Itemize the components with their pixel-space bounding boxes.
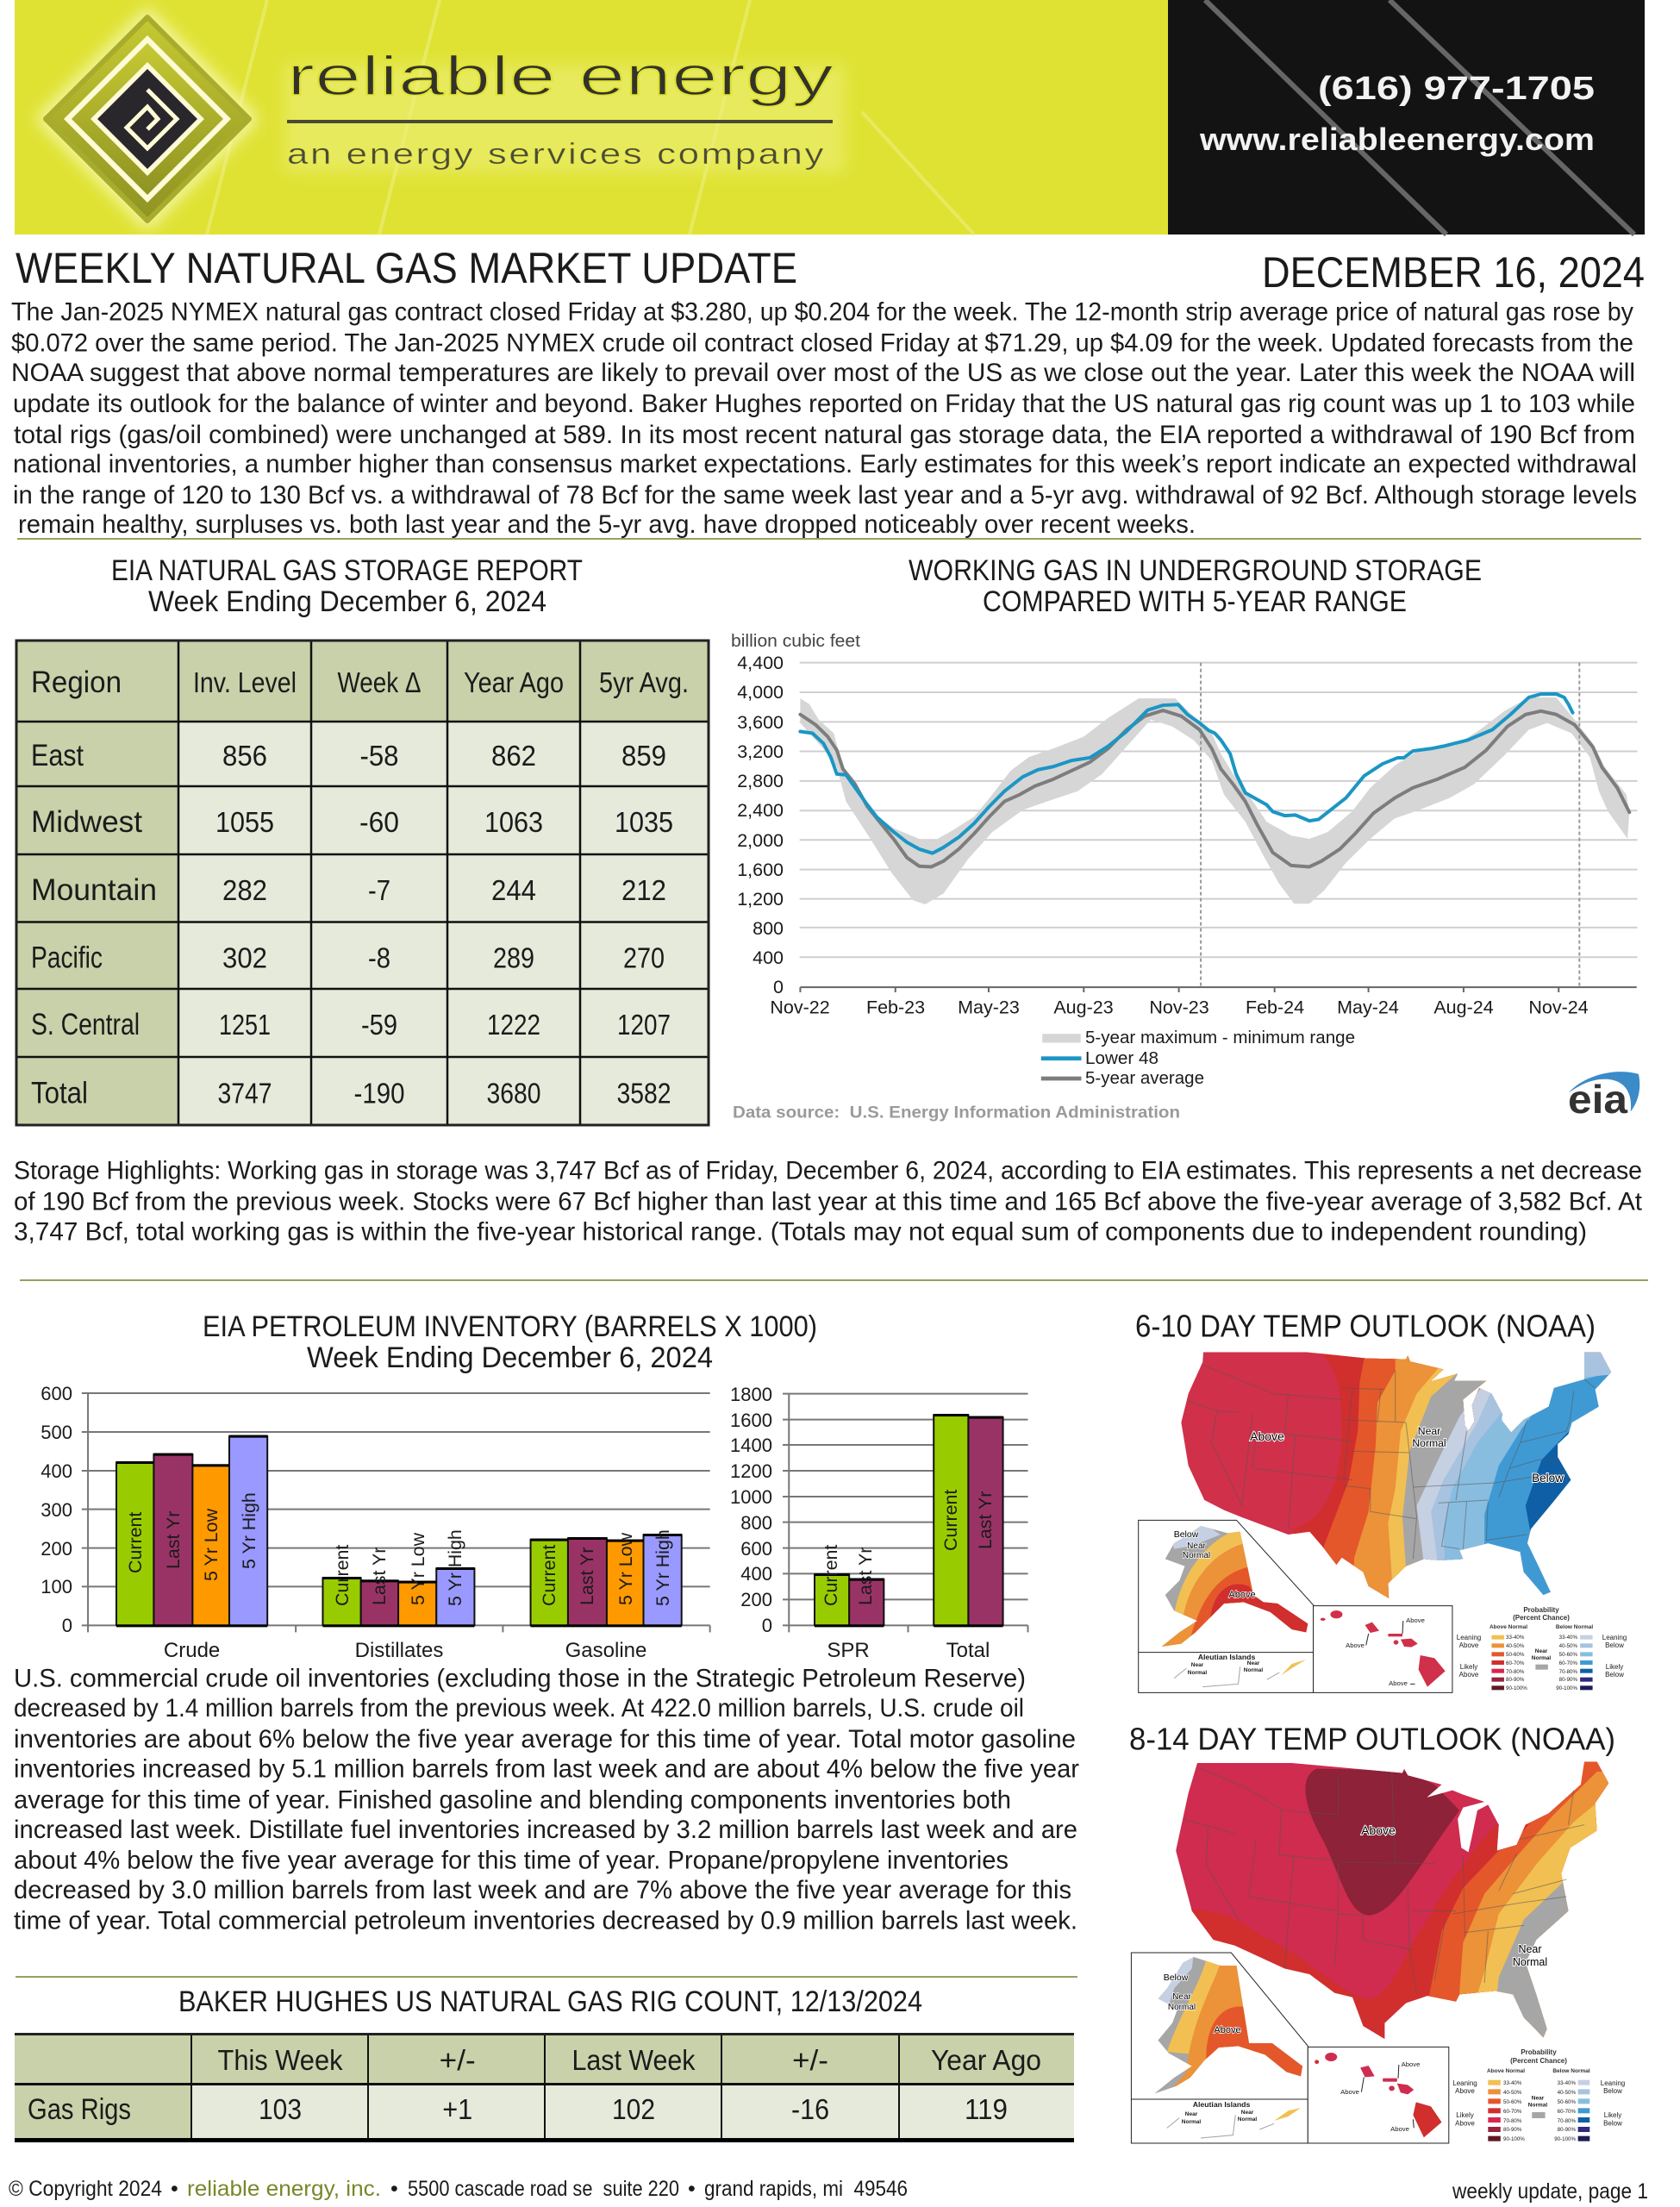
chart: working gas in underground storage — [731, 632, 1639, 1122]
divider rule — [287, 120, 833, 123]
map labels: Near — [1187, 1541, 1207, 1551]
inset labels — [1182, 2060, 1420, 2133]
row: S. Central — [31, 1008, 671, 1041]
probability legend text: 40-50% — [1506, 1643, 1525, 1649]
probability legend text: 90-100% — [1503, 2136, 1525, 2142]
probability legend text: Below Normal — [1556, 1624, 1593, 1630]
inset labels: Aleutian Islands — [1198, 1653, 1255, 1661]
rig table header: This Week — [217, 2044, 343, 2076]
category labels: Gasoline — [565, 1639, 646, 1662]
left axis labels: 0 — [62, 1615, 72, 1636]
x axis labels: Feb-24 — [1246, 997, 1304, 1017]
probability legend text: 33-40% — [1506, 1635, 1525, 1641]
rig table row: 103 — [259, 2093, 302, 2125]
inset labels: Aleutian Islands — [1193, 2100, 1250, 2109]
map artwork — [1131, 1761, 1608, 2143]
probability legend text: Probability — [1521, 2048, 1557, 2056]
chart legend: 5-year maximum - minimum range — [1085, 1028, 1355, 1047]
y axis labels: 400 — [753, 947, 784, 968]
probability legend text: Above — [1459, 1641, 1479, 1649]
row: Midwest: 1035 — [615, 806, 673, 838]
row: East: -58 — [360, 740, 398, 772]
probability legend swatches — [1491, 1635, 1593, 1690]
inset labels: Above — [1406, 1616, 1425, 1624]
probability legend text: 80-90% — [1503, 2127, 1522, 2133]
petroleum commentary paragraph — [14, 1664, 1079, 1935]
category labels — [164, 1639, 990, 1662]
company name: reliable energy — [287, 45, 834, 107]
Hawaii inset — [1308, 2047, 1449, 2143]
probability legend text: Above — [1455, 2120, 1475, 2128]
y axis labels: 2,000 — [737, 830, 784, 851]
row: Total: 3747 — [217, 1078, 272, 1109]
probability legend text: 33-40% — [1558, 2080, 1576, 2086]
row: S. Central: S. Central — [31, 1008, 140, 1041]
row: Mountain — [31, 873, 666, 907]
row: Midwest: 1063 — [484, 806, 543, 838]
market summary paragraph — [11, 298, 1637, 539]
probability legend text: 33-40% — [1503, 2080, 1522, 2086]
row: Total: -190 — [353, 1078, 405, 1109]
phone number: (616) 977-1705 — [1318, 71, 1595, 107]
probability legend text: Below — [1605, 1641, 1624, 1649]
map labels: Normal — [1183, 1551, 1210, 1560]
bar labels: Current — [940, 1490, 961, 1551]
map labels: Above — [1228, 1590, 1256, 1600]
map labels: Near — [1518, 1943, 1542, 1955]
probability legend text: 40-50% — [1503, 2090, 1522, 2096]
left axis labels — [41, 1383, 72, 1636]
heading: 8-14 day outlook: 8-14 DAY TEMP OUTLOOK (NOAA) — [1129, 1721, 1615, 1757]
row: Midwest: Midwest — [31, 805, 142, 839]
icon: reliable energy diamond logo — [35, 7, 259, 231]
rig table row: -16 — [791, 2093, 829, 2125]
row: Total: 3680 — [486, 1078, 541, 1109]
icon: EIA arc — [1569, 1072, 1639, 1111]
table: rig count — [15, 2033, 1074, 2142]
y axis labels: 3,200 — [737, 741, 784, 762]
inset labels: Above — [1389, 1679, 1408, 1687]
rig table row: 119 — [965, 2093, 1008, 2125]
heading: rig count: BAKER HUGHES US NATURAL GAS RIG COUNT, 12/13/2024 — [178, 1985, 922, 2018]
map: 6-10 day temperature outlook — [1138, 1352, 1627, 1693]
heading: 6-10 day outlook: 6-10 DAY TEMP OUTLOOK (NOAA) — [1135, 1309, 1596, 1343]
right axis labels: 1200 — [730, 1460, 772, 1482]
table header row: Week Δ — [338, 666, 421, 698]
probability legend text: Below — [1603, 2087, 1622, 2095]
category labels: SPR — [827, 1639, 870, 1662]
chart legend: Lower 48 — [1085, 1049, 1159, 1068]
probability legend text: 70-80% — [1559, 1669, 1577, 1675]
probability legend text: 33-40% — [1559, 1635, 1577, 1641]
map labels: Normal — [1168, 2003, 1196, 2012]
rig table row: Gas Rigs — [28, 2093, 131, 2126]
probability legend text: 60-70% — [1503, 2109, 1522, 2115]
right axis labels — [730, 1384, 772, 1636]
y axis labels: 1,600 — [737, 860, 784, 880]
x axis labels: Nov-22 — [770, 997, 830, 1017]
probability legend text: 50-60% — [1503, 2099, 1522, 2105]
probability legend text: Below — [1605, 1671, 1624, 1679]
market summary paragraph: total rigs (gas/oil combined) were unchanged at 589. In its most recent natural gas storage data, the EIA reported a withdrawal of 190 Bcf from — [14, 421, 1635, 449]
row: East: East — [31, 739, 84, 772]
bar labels: 5 Yr High — [653, 1529, 673, 1606]
probability legend text: Leaning — [1601, 2079, 1625, 2087]
heading: storage report: EIA NATURAL GAS STORAGE REPORT — [111, 554, 583, 587]
heading: petroleum inventory: Week Ending December 6, 2024 — [307, 1341, 713, 1374]
city: grand rapids, mi 49546 — [704, 2177, 908, 2201]
map labels: Above — [1250, 1429, 1284, 1443]
probability legend text: 90-100% — [1554, 2136, 1576, 2142]
map labels — [1174, 1425, 1564, 1600]
bar labels: Current — [125, 1512, 146, 1573]
market summary paragraph: update its outlook for the balance of winter and beyond. Baker Hughes reported on Friday that the US natural gas rig count was up 1 to 103 while — [13, 390, 1635, 418]
probability legend text: Likely — [1460, 1663, 1477, 1671]
map artwork — [1138, 1352, 1612, 1693]
bar labels — [125, 1490, 996, 1606]
chart legend: 5-year average — [1085, 1069, 1204, 1088]
inset labels: Near — [1241, 2110, 1254, 2116]
left axis labels: 500 — [41, 1422, 72, 1443]
probability legend text: 70-80% — [1506, 1669, 1525, 1675]
row: Total: Total — [31, 1076, 88, 1110]
inset labels: Above — [1340, 2088, 1359, 2096]
map: 8-14 day temperature outlook — [1131, 1761, 1625, 2143]
probability legend text: 90-100% — [1556, 1685, 1577, 1691]
table: EIA storage report — [16, 640, 709, 1126]
heading: storage report — [111, 554, 583, 618]
row: Mountain: 282 — [222, 874, 267, 906]
x axis labels: May-23 — [958, 997, 1020, 1017]
probability legend text: 70-80% — [1558, 2118, 1576, 2124]
state boundary lines — [1189, 1365, 1595, 1559]
footer: • — [171, 2177, 178, 2201]
row: East: 859 — [621, 740, 666, 772]
Alaska and Aleutian inset — [1139, 1520, 1321, 1692]
right axis labels: 200 — [740, 1589, 772, 1610]
Alaska and Aleutian inset — [1131, 1953, 1308, 2143]
row: Pacific: 289 — [493, 941, 534, 974]
probability legend text: Likely — [1606, 1663, 1623, 1671]
x axis labels: Aug-24 — [1433, 997, 1494, 1017]
bar labels: Current — [821, 1545, 841, 1606]
x axis labels — [770, 997, 1589, 1017]
inset labels: Normal — [1182, 2119, 1201, 2125]
row: Total: 3582 — [617, 1078, 671, 1109]
petroleum commentary paragraph: time of year. Total commercial petroleum inventories decreased by 0.9 million barrels last week. — [14, 1907, 1077, 1935]
x axis labels: Aug-23 — [1053, 997, 1114, 1017]
EIA wordmark: eia — [1568, 1077, 1627, 1122]
copyright: © Copyright 2024 — [9, 2177, 162, 2201]
tagline: an energy services company — [287, 138, 826, 171]
right axis labels: 1000 — [730, 1486, 772, 1508]
inset labels: Above — [1402, 2060, 1420, 2068]
petroleum commentary paragraph: increased last week. Distillate fuel inventories increased by 3.2 million barrels last week and are — [14, 1816, 1077, 1844]
map labels: Below — [1164, 1973, 1189, 1983]
bar labels: Last Yr — [975, 1491, 996, 1549]
petroleum commentary paragraph: decreased by 1.4 million barrels from the previous week. At 422.0 million barrels, U.S. crude oil — [14, 1694, 1024, 1722]
inset labels: Near — [1185, 2111, 1198, 2117]
heading: working gas chart: COMPARED WITH 5-YEAR RANGE — [983, 585, 1407, 618]
map labels: Near — [1418, 1425, 1440, 1437]
bar plot area — [81, 1392, 1029, 1633]
x axis labels: May-24 — [1337, 997, 1399, 1017]
row: Pacific: 302 — [222, 941, 267, 974]
left axis labels: 600 — [41, 1383, 72, 1404]
market summary paragraph: $0.072 over the same period. The Jan-2025 NYMEX crude oil contract closed Friday at $71.29, up $4.09 for the week. Updated forecasts from the — [11, 329, 1633, 357]
probability legend text: Below — [1603, 2120, 1622, 2128]
footer: • — [390, 2177, 398, 2201]
probability legend text: 80-90% — [1558, 2127, 1576, 2133]
table header row — [31, 666, 689, 699]
probability legend text: Likely — [1456, 2111, 1474, 2119]
bar labels: 5 Yr Low — [615, 1532, 636, 1605]
inset labels: Normal — [1238, 2116, 1257, 2123]
probability legend text: 50-60% — [1506, 1652, 1525, 1658]
probability legend text: Above Normal — [1490, 1624, 1527, 1630]
row: Midwest: 1055 — [215, 806, 274, 838]
petroleum commentary paragraph: average for this time of year. Finished gasoline and blending components inventories both — [14, 1786, 1011, 1814]
probability legend text: 90-100% — [1506, 1685, 1527, 1691]
map labels: Normal — [1412, 1437, 1446, 1449]
contiguous US bands — [1181, 1352, 1612, 1598]
heading: petroleum inventory — [203, 1310, 817, 1374]
data source: Data source: U.S. Energy Information Administration — [733, 1104, 1180, 1122]
rig table header: +/- — [440, 2044, 476, 2076]
right axis labels: 800 — [740, 1512, 772, 1534]
bar labels: Current — [332, 1545, 353, 1606]
probability legend swatches — [1488, 2080, 1589, 2141]
probability legend text: Near — [1532, 2096, 1545, 2102]
probability legend text: Below Normal — [1552, 2068, 1590, 2074]
y axis labels: 3,600 — [737, 712, 784, 733]
header yellow panel — [15, 0, 1168, 234]
probability legend text: 60-70% — [1559, 1660, 1577, 1666]
probability legend text: 60-70% — [1558, 2109, 1576, 2115]
storage highlights text: Storage Highlights: Working gas in storage was 3,747 Bcf as of Friday, December 6, 2024, according to EIA estimates. This represents a net decrease — [14, 1157, 1642, 1185]
Hawaii inset — [1314, 1606, 1452, 1692]
probability legend text — [1457, 1606, 1627, 1691]
right axis labels: 1600 — [730, 1410, 772, 1431]
row: Mountain: -7 — [368, 874, 390, 906]
probability legend text: Normal — [1532, 1655, 1551, 1661]
heading: petroleum inventory: EIA PETROLEUM INVENTORY (BARRELS X 1000) — [203, 1310, 817, 1343]
row: S. Central: 1222 — [487, 1009, 540, 1041]
petroleum commentary paragraph: inventories are about 6% below the five year average for this time of year. Total motor gasoline — [14, 1725, 1076, 1754]
bar labels: Current — [539, 1545, 559, 1606]
heading: storage report: Week Ending December 6, 2024 — [148, 585, 546, 618]
storage highlights text: of 190 Bcf from the previous week. Stocks were 67 Bcf higher than last year at this time and 165 Bcf above the five-year average of 3,582 Bcf. At — [14, 1188, 1643, 1216]
probability legend text: Near — [1535, 1648, 1548, 1654]
probability legend text: Above Normal — [1487, 2068, 1525, 2074]
map labels: Normal — [1513, 1956, 1547, 1968]
probability legend text: 50-60% — [1559, 1652, 1577, 1658]
inset labels: Near — [1191, 1662, 1204, 1668]
map labels — [1164, 1823, 1547, 2035]
probability legend text: 60-70% — [1506, 1660, 1525, 1666]
contact panel — [1168, 0, 1645, 234]
rig table header: Year Ago — [931, 2044, 1041, 2076]
table header row: Region — [31, 666, 122, 699]
market summary paragraph: national inventories, a number higher than consensus market expectations. Early estimates for this week’s report indicate an expected withdrawal — [13, 450, 1637, 478]
y axis labels: 2,400 — [737, 800, 784, 821]
petroleum commentary paragraph: decreased by 3.0 million barrels from last week and are 7% above the five year average for this — [14, 1876, 1071, 1904]
rig table header — [217, 2044, 1041, 2076]
category labels: Crude — [164, 1639, 220, 1662]
category labels: Total — [946, 1639, 990, 1662]
heading: working gas chart — [909, 554, 1482, 618]
state boundary lines — [1183, 1767, 1584, 1994]
probability legend text: Leaning — [1452, 2079, 1477, 2087]
probability legend text: (Percent Chance) — [1510, 2057, 1567, 2065]
row: Midwest — [31, 805, 673, 839]
map labels: Above — [1214, 2025, 1241, 2035]
bar labels: Last Yr — [577, 1547, 597, 1605]
storage highlights text: 3,747 Bcf, total working gas is within the five-year historical range. (Totals may not equal sum of components due to independent rounding) — [14, 1217, 1587, 1247]
left axis labels: 100 — [41, 1576, 72, 1597]
rig table row: 102 — [612, 2093, 655, 2125]
map labels: Below — [1532, 1472, 1564, 1485]
address: 5500 cascade road se suite 220 — [408, 2177, 679, 2201]
inset labels: Above — [1390, 2125, 1409, 2133]
row: S. Central: 1207 — [617, 1009, 671, 1041]
table header row: Inv. Level — [193, 666, 297, 698]
bar labels: 5 Yr Low — [201, 1508, 222, 1581]
y axis labels: 4,400 — [737, 653, 784, 673]
y axis labels: 2,800 — [737, 771, 784, 791]
x axis labels: Nov-23 — [1149, 997, 1209, 1017]
row: Midwest: -60 — [359, 806, 399, 838]
footer — [9, 2177, 1648, 2204]
market summary paragraph: in the range of 120 to 130 Bcf vs. a withdrawal of 78 Bcf for the same week last year and a 5-yr avg. withdrawal of 92 Bcf. Although storage levels — [13, 481, 1637, 510]
x axis labels: Feb-23 — [866, 997, 925, 1017]
market summary paragraph: NOAA suggest that above normal temperatures are likely to prevail over most of the US as we close out the year. Later this week the NOAA will — [11, 359, 1635, 387]
probability legend text: Above — [1459, 1671, 1479, 1679]
row: S. Central: -59 — [361, 1009, 397, 1041]
heading: working gas chart: WORKING GAS IN UNDERGROUND STORAGE — [909, 554, 1482, 587]
right axis labels: 1800 — [730, 1384, 772, 1405]
y axis labels: 1,200 — [737, 889, 784, 910]
probability legend text: (Percent Chance) — [1513, 1614, 1570, 1622]
header banner — [15, 0, 1645, 234]
right axis labels: 400 — [740, 1563, 772, 1585]
probability legend text: 40-50% — [1558, 2090, 1576, 2096]
rig table header: Last Week — [572, 2044, 696, 2076]
chart plot area — [798, 662, 1639, 1112]
map labels: Below — [1174, 1529, 1199, 1540]
probability legend text: Above — [1455, 2087, 1475, 2095]
probability legend text: Probability — [1523, 1606, 1559, 1614]
right axis labels: 1400 — [730, 1435, 772, 1456]
probability legend text: Leaning — [1457, 1634, 1481, 1641]
row: Pacific: 270 — [623, 941, 665, 974]
inset labels: Near — [1247, 1660, 1260, 1666]
row: S. Central: 1251 — [219, 1009, 271, 1041]
table header row: 5yr Avg. — [599, 666, 689, 698]
storage highlights text — [14, 1157, 1643, 1247]
row: Pacific: Pacific — [31, 941, 103, 974]
y axis unit: billion cubic feet — [731, 632, 860, 651]
left axis labels: 400 — [41, 1460, 72, 1482]
table header row: Year Ago — [464, 666, 564, 698]
page marker: weekly update, page 1 — [1452, 2179, 1648, 2204]
probability legend text: 80-90% — [1506, 1677, 1525, 1683]
row: East: 856 — [222, 740, 267, 772]
petroleum commentary paragraph: inventories increased by 5.1 million barrels from last week and are about 4% below the five year — [14, 1755, 1079, 1783]
bar labels: 5 Yr High — [445, 1529, 465, 1606]
rig table row — [28, 2093, 1008, 2126]
probability legend text: 80-90% — [1559, 1677, 1577, 1683]
y axis labels: 800 — [753, 918, 784, 939]
x axis labels: Nov-24 — [1528, 997, 1589, 1017]
row: East: 862 — [491, 740, 536, 772]
bar labels: Last Yr — [369, 1547, 390, 1605]
probability legend text — [1452, 2048, 1625, 2142]
row: Pacific: -8 — [368, 941, 390, 974]
probability legend text: Normal — [1528, 2103, 1547, 2109]
probability legend text: Leaning — [1602, 1634, 1627, 1641]
market summary paragraph: remain healthy, surpluses vs. both last year and the 5-yr avg. have dropped noticeably over recent weeks. — [18, 510, 1196, 539]
row: Mountain: Mountain — [31, 873, 157, 907]
map labels: Near — [1172, 1992, 1192, 2002]
right axis labels: 0 — [762, 1615, 772, 1636]
bar labels: Last Yr — [163, 1511, 184, 1569]
row: Total — [31, 1076, 671, 1110]
page title: WEEKLY NATURAL GAS MARKET UPDATE — [16, 244, 797, 292]
chart: petroleum inventory bars — [41, 1383, 1027, 1662]
company name: reliable energy, inc. — [187, 2177, 381, 2201]
report date: DECEMBER 16, 2024 — [1262, 248, 1645, 297]
probability legend text: 40-50% — [1559, 1643, 1577, 1649]
bar labels: 5 Yr High — [239, 1492, 259, 1569]
probability legend text: 70-80% — [1503, 2118, 1522, 2124]
series bars — [116, 1415, 1003, 1625]
row: Mountain: 212 — [621, 874, 666, 906]
rig table header: +/- — [792, 2044, 828, 2076]
probability legend text: Likely — [1604, 2111, 1621, 2119]
row: Mountain: 244 — [491, 874, 536, 906]
category labels: Distillates — [355, 1639, 443, 1662]
rig table row: +1 — [442, 2093, 472, 2125]
legend swatches — [1041, 1034, 1081, 1080]
petroleum commentary paragraph: U.S. commercial crude oil inventories (excluding those in the Strategic Petroleum Reserve) — [14, 1664, 1026, 1693]
map labels: Above — [1361, 1823, 1396, 1837]
contiguous US bands — [1176, 1761, 1608, 2039]
inset labels: Normal — [1244, 1667, 1263, 1673]
left axis labels: 200 — [41, 1538, 72, 1560]
chart legend — [1085, 1028, 1355, 1088]
y axis labels: 4,000 — [737, 682, 784, 703]
row: East — [31, 739, 666, 772]
footer: • — [688, 2177, 696, 2201]
petroleum commentary paragraph: about 4% below the five year average for this time of year. Propane/propylene inventories — [14, 1847, 1009, 1874]
y axis labels — [737, 653, 784, 997]
right axis labels: 600 — [740, 1538, 772, 1560]
bar labels: Last Yr — [855, 1547, 876, 1605]
probability legend text: 50-60% — [1558, 2099, 1576, 2105]
row: Pacific — [31, 941, 665, 974]
bar labels: 5 Yr Low — [408, 1532, 428, 1605]
inset labels — [1188, 1616, 1425, 1687]
left axis labels: 300 — [41, 1499, 72, 1521]
inset labels: Normal — [1188, 1670, 1207, 1676]
inset labels: Above — [1346, 1641, 1365, 1649]
market summary paragraph: The Jan-2025 NYMEX natural gas contract closed Friday at $3.280, up $0.204 for the week. The 12-month strip average price of natural gas rose by — [11, 298, 1633, 326]
y axis labels: 0 — [773, 977, 784, 997]
website: www.reliableenergy.com — [1199, 122, 1595, 157]
